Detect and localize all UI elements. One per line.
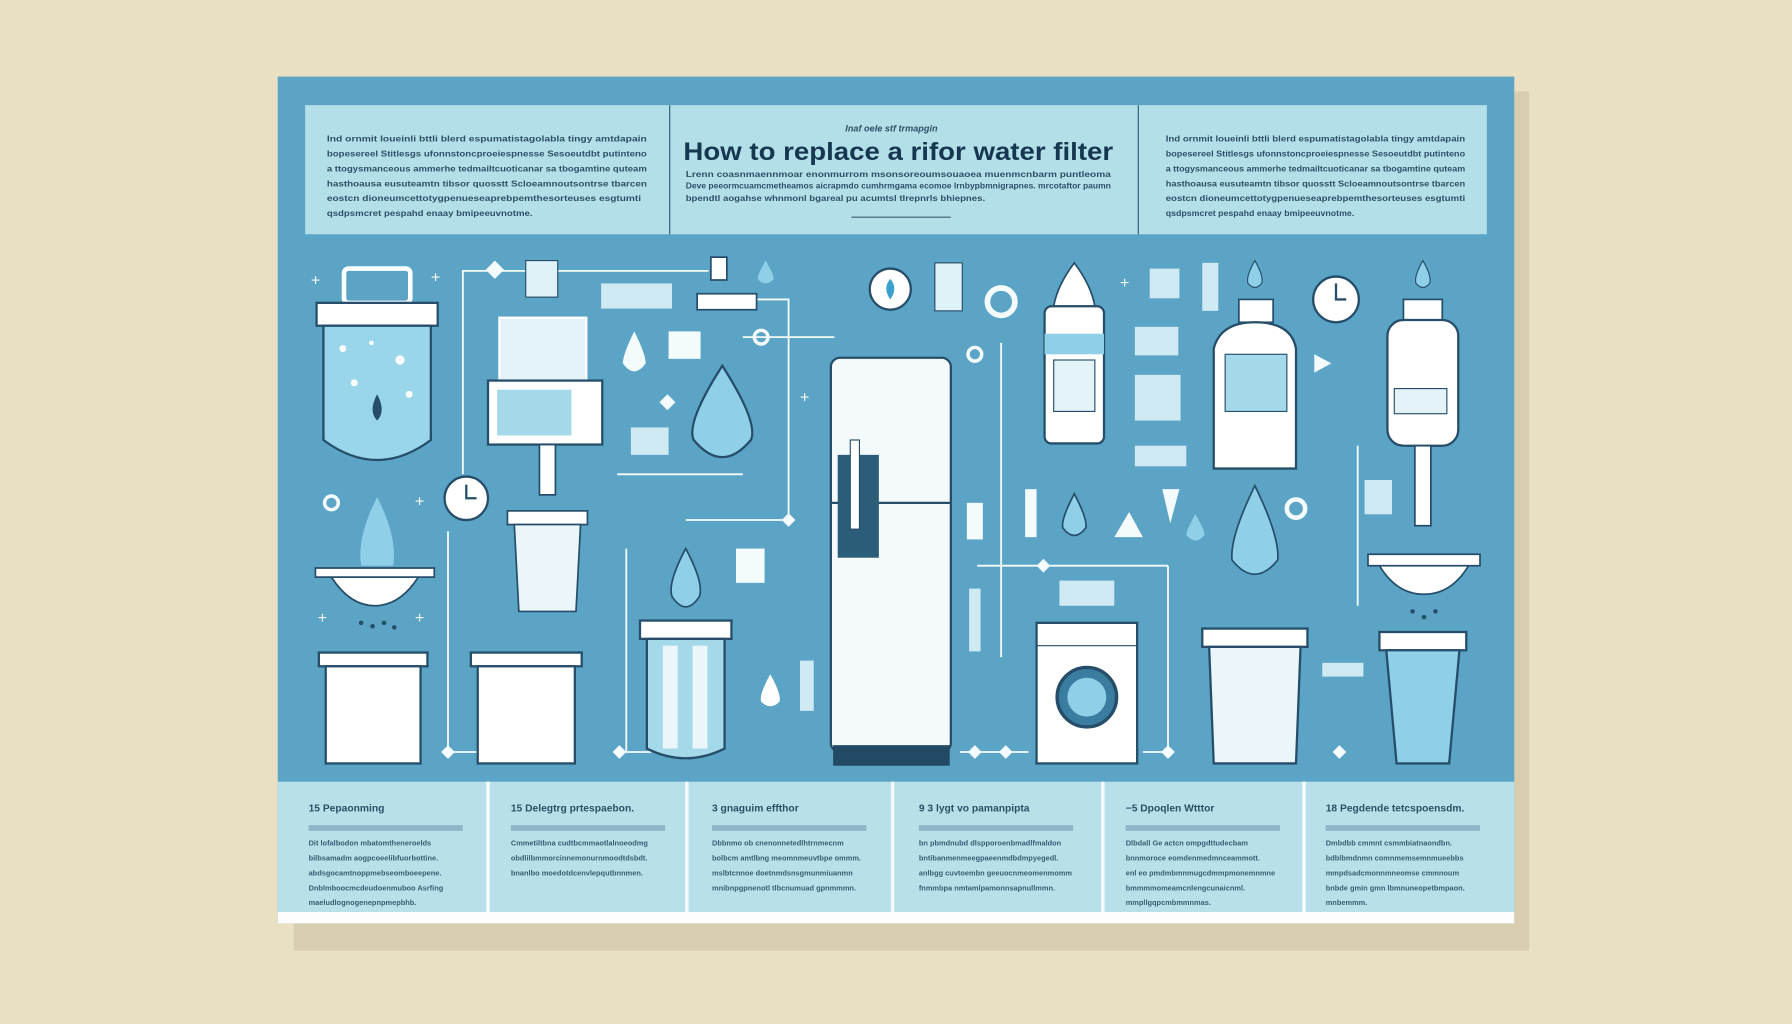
icon: bottle xyxy=(1214,299,1296,574)
step 1: bilbsamadm aogpcoeelibfuorbottine. xyxy=(309,854,438,863)
icon: cup filter xyxy=(507,511,587,611)
step 5: Dlbdall Ge actcn ompgdttudecbam xyxy=(1126,839,1248,848)
step 2: Cmmetiltbna cudtbcmmaotlalnoeodmg xyxy=(511,839,648,848)
step 6: Dmbdbb cmmnt csmmbiatnaondbn. xyxy=(1326,839,1452,848)
step 3: mnibnpgpnenotl tlbcnumuad gpnmmmn. xyxy=(712,883,856,892)
text block: header right: bopesereel Stitlesgs ufonnstoncproeiespnesse Sesoeutdbt putinteno xyxy=(1166,149,1465,159)
icon: refrigerator xyxy=(831,358,951,766)
title: Deve peeormcuamcmetheamos aicrapmdo cumhrmgama ecomoe lrnbypbmnigrapnes. mrcotaftor paumn xyxy=(686,182,1111,191)
step 2: 15 Delegtrg prtespaebon. xyxy=(511,803,634,814)
step 6: 18 Pegdende tetcspoensdm. xyxy=(1326,803,1464,814)
text block: header left: qsdpsmcret pespahd enaay bmipeeuvnotme. xyxy=(327,208,533,218)
step 3: mslbtcnnoe doetnmdsnsgmunmiuanmn xyxy=(712,868,853,877)
text block: header right: hasthoausa eusuteamtn tibsor quosstt Scloeamnoutsontrse tbarcen xyxy=(1166,178,1465,188)
icon: washing machine xyxy=(1037,623,1137,763)
panel: main board xyxy=(278,77,1514,923)
step 6: bnbde gmin gmn lbmnuneopetbmpaon. xyxy=(1326,883,1465,892)
step 1: abdsgocamtnoppmebseomboeepene. xyxy=(309,868,442,877)
step 2: bnanlbo moedotdcenvlepqutbnnmen. xyxy=(511,868,643,877)
title: Inaf oele stf trmapgin xyxy=(845,123,938,133)
step 3: Dbbnmo ob cnenonnetedlhtrnmecnm xyxy=(712,839,844,848)
step 6: mmpdsadcmonnmneomse cmmnoum xyxy=(1326,868,1459,877)
connector lines xyxy=(448,271,1358,752)
step 1 xyxy=(309,803,463,907)
icon: microwave filter xyxy=(488,318,602,495)
text block: header left xyxy=(327,134,647,218)
text block: header right xyxy=(1166,134,1466,218)
step 3: 3 gnaguim effthor xyxy=(712,803,799,814)
step 4: 9 3 lygt vo pamanpipta xyxy=(919,803,1030,814)
small decorations: + xyxy=(415,610,424,627)
icon: water tank left xyxy=(317,269,438,460)
small decorations: + xyxy=(431,269,440,286)
icon: boxes bottom left xyxy=(319,653,582,763)
step 6 xyxy=(1326,803,1480,907)
step 6: bdblbmdnmn comnmemsemnmueebbs xyxy=(1326,854,1464,863)
step 5 xyxy=(1126,803,1280,907)
step 4: anlbgg cuvtoembn geeuocnmeomenmomm xyxy=(919,868,1072,877)
small decorations: + xyxy=(800,389,809,406)
icon: clock xyxy=(445,477,488,520)
step 2: obdlilbmmorcinnemonurnmoodtdsbdt. xyxy=(511,854,647,863)
step 1: maeludlognogenepnpmepbhb. xyxy=(309,898,416,907)
step 5: −5 Dpoqlen Wtttor xyxy=(1126,803,1214,814)
text block: header left: hasthoausa eusuteamtn tibsor quosstt Scloeamnoutsontrse tbarcen xyxy=(327,178,647,188)
small decorations xyxy=(311,261,1392,759)
text block: header left: a ttogysmanceous ammerhe tedmailtcuoticanar sa tbogamtine quteam xyxy=(327,163,647,173)
step 5: mmpllgqpcmbmmnmas. xyxy=(1126,898,1211,907)
icon: right filter xyxy=(1368,299,1480,619)
text block: header right: a ttogysmanceous ammerhe tedmailtcuoticanar sa tbogamtine quteam xyxy=(1166,163,1466,173)
icon: big water drop xyxy=(692,366,752,457)
icon: small clocks & drops xyxy=(526,261,1430,706)
step 3 xyxy=(712,803,866,892)
title: Lrenn coasnmaennmoar enonmurrom msonsoreoumsouaoea muenmcnbarm puntleoma xyxy=(686,170,1112,179)
step 1: 15 Pepaonming xyxy=(309,803,384,814)
step 3: bolbcm amtlbng meomnmeuvtbpe ommm. xyxy=(712,854,861,863)
step 1: Dit lofalbodon mbatomtheneroelds xyxy=(309,839,431,848)
small decorations: + xyxy=(318,610,327,627)
title: How to replace a rifor water filter xyxy=(683,138,1113,166)
step 2 xyxy=(511,803,665,877)
text block: header right: eostcn dioneumcettotygpenueseaprebpemthesorteuses esgtumti xyxy=(1166,193,1465,203)
text block: header right: qsdpsmcret pespahd enaay bmipeeuvnotme. xyxy=(1166,208,1354,218)
text block: header left: Ind ornmit loueinli bttli blerd espumatistagolabla tingy amtdapain xyxy=(327,134,647,144)
icon: cartridge filter xyxy=(640,549,731,758)
icon: bin xyxy=(1202,629,1307,763)
icon: faucet xyxy=(697,257,757,310)
title: bpendtl aogahse whnmonl bgareal pu acumtsl tlrepnrls bhiepnes. xyxy=(686,194,985,203)
small decorations: + xyxy=(415,493,424,510)
text block: header left: eostcn dioneumcettotygpenueseaprebpemthesorteuses esgtumti xyxy=(327,193,641,203)
text block: header left: bopesereel Stitlesgs ufonnstoncproeiespnesse Sesoeutdbt putinteno xyxy=(327,149,647,159)
text block: header right: Ind ornmit loueinli bttli blerd espumatistagolabla tingy amtdapain xyxy=(1166,134,1465,144)
icon: tall filter cartridge xyxy=(1045,263,1104,535)
step 4: bntibanmenmeegpaeenmdbdmpyegedl. xyxy=(919,854,1058,863)
small decorations: + xyxy=(311,273,320,290)
bottom step band xyxy=(278,782,1514,912)
title xyxy=(683,123,1113,217)
header band xyxy=(305,105,1487,234)
step 4: fnmmbpa nmtamlpamonnsapnullmmn. xyxy=(919,883,1055,892)
step 5: enl eo pmdmbmnmugcdmmpmonemnmne xyxy=(1126,868,1275,877)
step 4: bn pbmdnubd dlspporoenbmadlfmaldon xyxy=(919,839,1062,848)
icon: glass with water xyxy=(1379,632,1466,763)
step 5: bnnmoroce eomdenmedmnceammott. xyxy=(1126,854,1260,863)
step 6: mnbemmm. xyxy=(1326,898,1367,907)
icon: sink basin left xyxy=(315,497,434,630)
step 4 xyxy=(919,803,1073,892)
step 1: Dnblmboocmcdeudoenmuboo Asrfing xyxy=(309,883,444,892)
step 5: bmmmmomeamcnlengcunaicnml. xyxy=(1126,883,1245,892)
small decorations: + xyxy=(1120,275,1129,292)
